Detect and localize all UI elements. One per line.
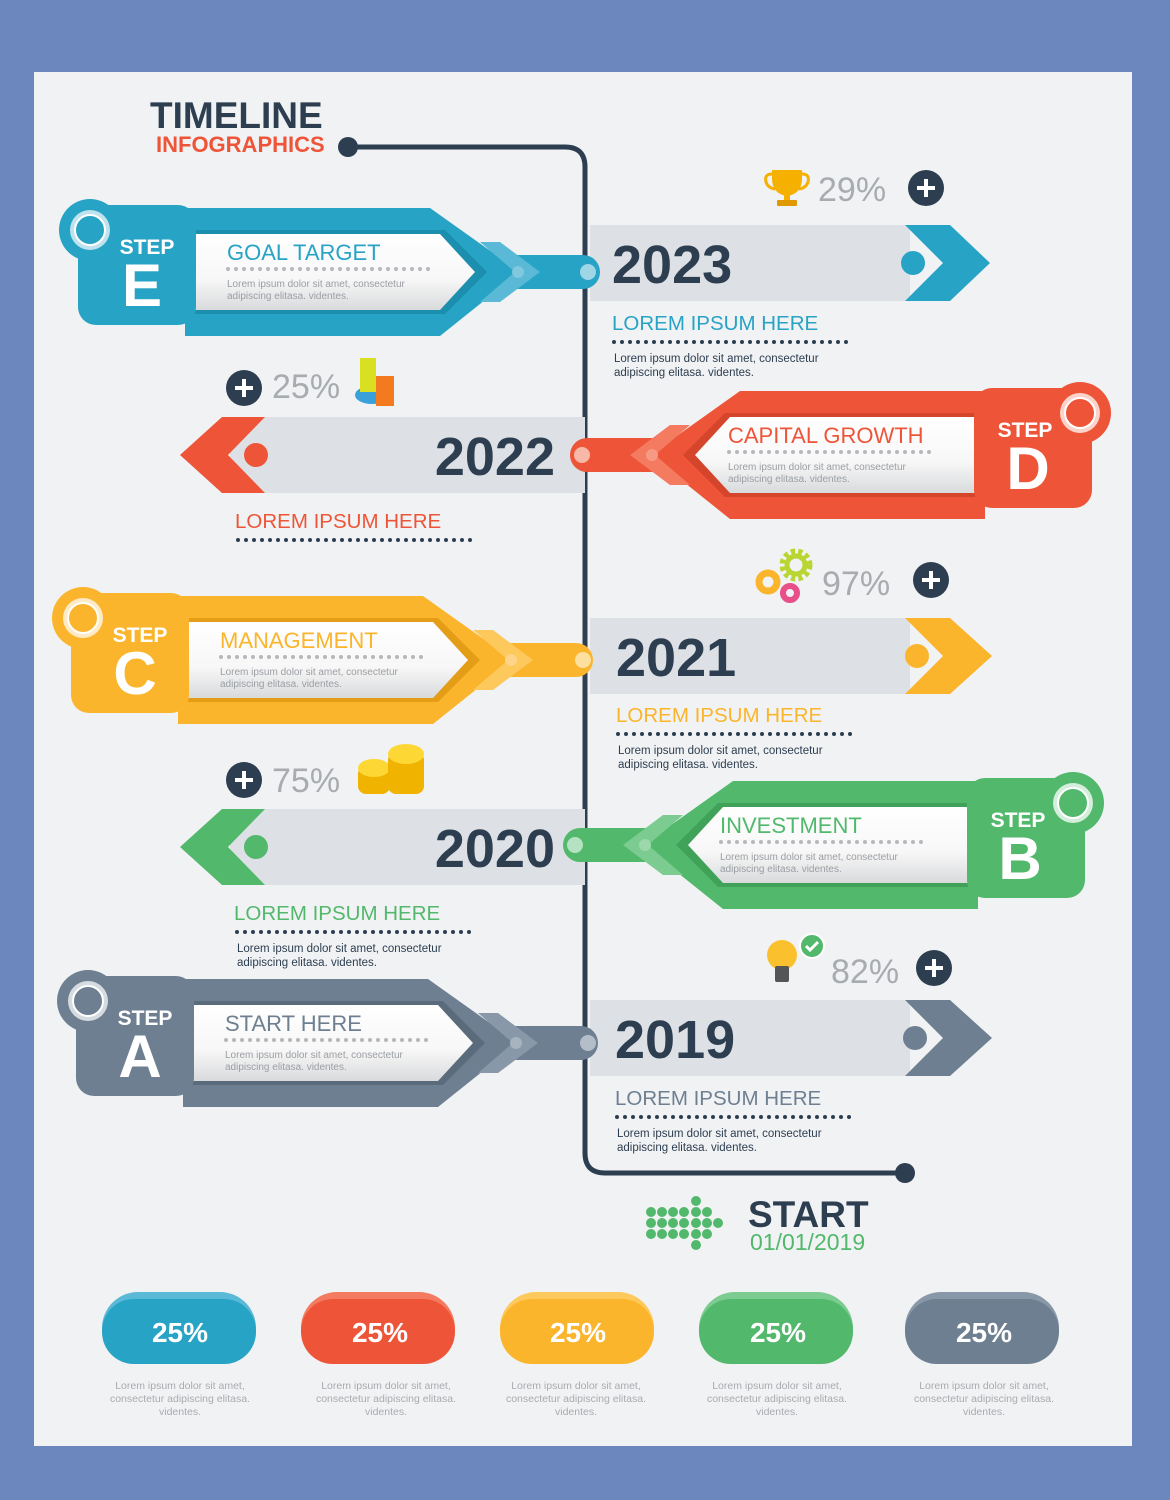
card: step A start here: adipiscing elitasa. videntes.: [225, 1062, 347, 1073]
pill: green 25%: Lorem ipsum dolor sit amet,: [712, 1380, 842, 1392]
card: step D capital growth: adipiscing elitasa. videntes.: [728, 474, 850, 485]
card: step C management: C: [113, 640, 157, 707]
pill: gray 25%: 25%: [956, 1317, 1012, 1348]
card: step A start here: STEP: [118, 1007, 172, 1030]
year band: 2019: 2019: [615, 1010, 735, 1070]
card: step A start here: [57, 970, 598, 1107]
stat: 25% chart: [226, 358, 394, 406]
card: step C management: adipiscing elitasa. videntes.: [220, 679, 342, 690]
year band: 2020: 2020: [435, 819, 555, 879]
title: INFOGRAPHICS: [156, 132, 325, 157]
pill: green 25%: videntes.: [756, 1406, 798, 1418]
card: step A start here: START HERE: [225, 1011, 362, 1036]
card: step D capital growth: CAPITAL GROWTH: [728, 423, 924, 448]
stat: 97% gears: 97%: [822, 565, 890, 603]
pill: gray 25%: [905, 1292, 1059, 1418]
year band: 2021: [590, 618, 992, 694]
card: step A start here: A: [118, 1023, 162, 1090]
pill: blue 25%: [102, 1292, 256, 1418]
start marker: 01/01/2019: [750, 1229, 865, 1255]
card: step D capital growth: Lorem ipsum dolor sit amet, consectetur: [728, 462, 907, 473]
stat: 25% chart: 25%: [272, 368, 340, 406]
pill: yellow 25%: Lorem ipsum dolor sit amet,: [511, 1380, 641, 1392]
card: step D capital growth: D: [1006, 435, 1050, 502]
text block: 2023 lorem: [612, 312, 854, 379]
text block: 2019 lorem: LOREM IPSUM HERE: [615, 1087, 821, 1110]
pill: green 25%: [699, 1292, 853, 1418]
card: step E goal target: Lorem ipsum dolor sit amet, consectetur: [227, 279, 406, 290]
card: step C management: [52, 587, 593, 724]
card: step B investment: STEP: [991, 809, 1045, 832]
text block: 2021 lorem: Lorem ipsum dolor sit amet, consectetur: [618, 745, 823, 757]
title: [150, 95, 325, 157]
text block: 2019 lorem: [615, 1087, 857, 1154]
card: step C management: STEP: [113, 624, 167, 647]
pill: red 25%: consectetur adipiscing elitasa.: [316, 1393, 456, 1405]
pill: red 25%: Lorem ipsum dolor sit amet,: [321, 1380, 451, 1392]
text block: 2023 lorem: adipiscing elitasa. videntes.: [614, 367, 754, 379]
card: step B investment: [563, 772, 1104, 909]
card: step E goal target: GOAL TARGET: [227, 240, 381, 265]
card: step E goal target: STEP: [120, 236, 174, 259]
pill: red 25%: videntes.: [365, 1406, 407, 1418]
text block: 2023 lorem: LOREM IPSUM HERE: [612, 312, 818, 335]
card: step B investment: INVESTMENT: [720, 813, 862, 838]
timeline line: [338, 137, 915, 1183]
pill: gray 25%: videntes.: [963, 1406, 1005, 1418]
card: step D capital growth: STEP: [998, 419, 1052, 442]
card: step B investment: B: [998, 825, 1042, 892]
year band: 2022: 2022: [435, 427, 555, 487]
pill: yellow 25%: 25%: [550, 1317, 606, 1348]
pill: blue 25%: videntes.: [159, 1406, 201, 1418]
pill: yellow 25%: [500, 1292, 654, 1418]
text block: 2020 lorem: LOREM IPSUM HERE: [234, 902, 440, 925]
stat: 82% bulb: 82%: [831, 953, 899, 991]
text block: 2023 lorem: Lorem ipsum dolor sit amet, consectetur: [614, 353, 819, 365]
text block: 2020 lorem: adipiscing elitasa. videntes.: [237, 957, 377, 969]
text block: 2021 lorem: adipiscing elitasa. videntes.: [618, 759, 758, 771]
text block: 2021 lorem: LOREM IPSUM HERE: [616, 704, 822, 727]
pill: blue 25%: consectetur adipiscing elitasa.: [110, 1393, 250, 1405]
pill: red 25%: [301, 1292, 456, 1418]
card: step B investment: Lorem ipsum dolor sit amet, consectetur: [720, 852, 899, 863]
stat: 75% coins: 75%: [272, 762, 340, 800]
stat: 29% trophy: [766, 170, 944, 209]
text block: 2019 lorem: Lorem ipsum dolor sit amet, consectetur: [617, 1128, 822, 1140]
text block: 2022 lorem: LOREM IPSUM HERE: [235, 510, 441, 533]
text block: 2019 lorem: adipiscing elitasa. videntes.: [617, 1142, 757, 1154]
year band: 2019: [590, 1000, 992, 1076]
pill: yellow 25%: videntes.: [555, 1406, 597, 1418]
pill: green 25%: consectetur adipiscing elitasa.: [707, 1393, 847, 1405]
card: step E goal target: E: [122, 252, 162, 319]
card: step E goal target: adipiscing elitasa. videntes.: [227, 291, 349, 302]
pill: blue 25%: Lorem ipsum dolor sit amet,: [115, 1380, 245, 1392]
text block: 2020 lorem: Lorem ipsum dolor sit amet, consectetur: [237, 943, 442, 955]
pill: gray 25%: consectetur adipiscing elitasa.: [914, 1393, 1054, 1405]
card: step A start here: Lorem ipsum dolor sit amet, consectetur: [225, 1050, 404, 1061]
year band: 2022: [180, 417, 585, 493]
pill: red 25%: 25%: [352, 1317, 408, 1348]
summary pills: [102, 1292, 1059, 1418]
stat: 29% trophy: 29%: [818, 171, 886, 209]
year band: 2020: [180, 809, 585, 885]
card: step E goal target: [59, 199, 600, 336]
card: step D capital growth: [570, 382, 1111, 519]
card: step C management: Lorem ipsum dolor sit amet, consectetur: [220, 667, 399, 678]
text block: 2021 lorem: [616, 704, 858, 771]
title: TIMELINE: [150, 95, 323, 136]
year band: 2023: [590, 225, 990, 301]
stat: 75% coins: [226, 744, 424, 800]
stat: 97% gears: [759, 552, 949, 603]
pill: blue 25%: 25%: [152, 1317, 208, 1348]
pill: gray 25%: Lorem ipsum dolor sit amet,: [919, 1380, 1049, 1392]
card: step C management: MANAGEMENT: [220, 628, 378, 653]
text block: 2020 lorem: [234, 902, 477, 969]
year band: 2023: 2023: [612, 235, 732, 295]
pill: green 25%: 25%: [750, 1317, 806, 1348]
year band: 2021: 2021: [616, 628, 736, 688]
start marker: START: [748, 1194, 869, 1235]
stat: 82% bulb: [767, 934, 952, 991]
pill: yellow 25%: consectetur adipiscing elitasa.: [506, 1393, 646, 1405]
card: step B investment: adipiscing elitasa. videntes.: [720, 864, 842, 875]
start marker: [646, 1194, 869, 1255]
